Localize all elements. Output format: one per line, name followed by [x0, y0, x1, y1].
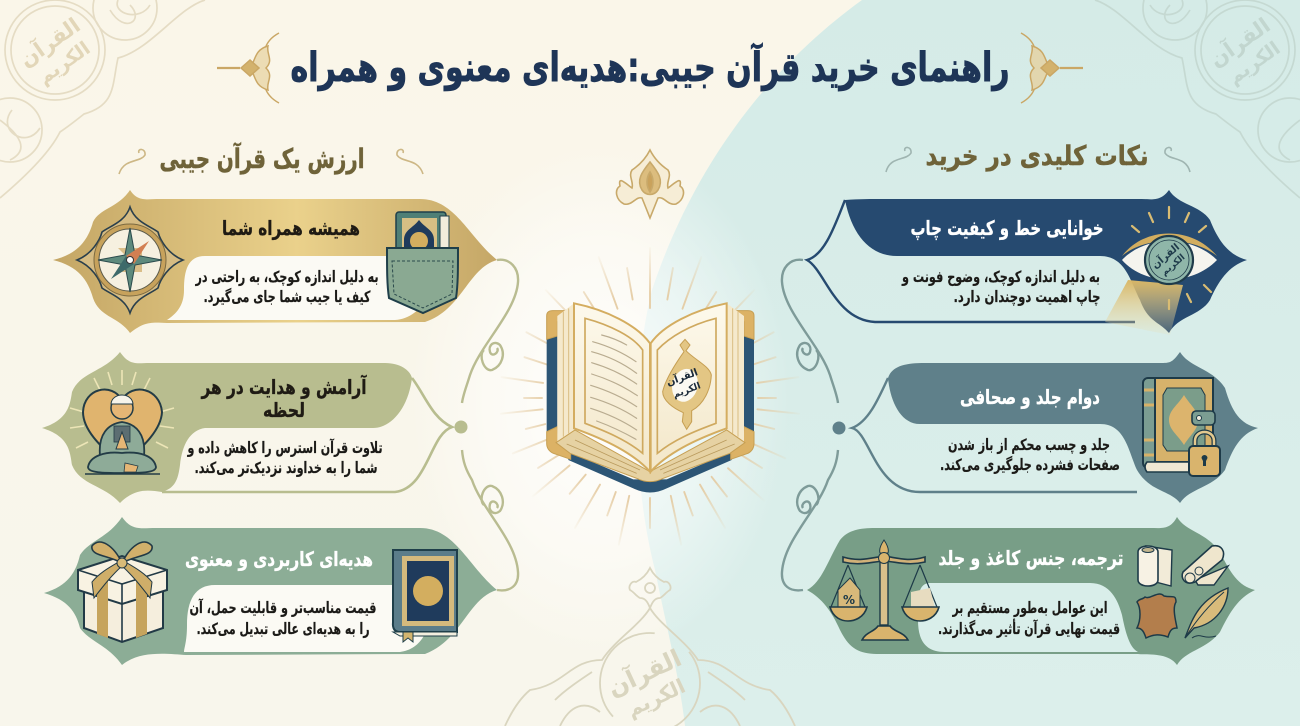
connector node [454, 420, 468, 434]
panel: peace and guidance [42, 352, 468, 503]
ornament: center flower [617, 150, 683, 218]
left page frame and lines [585, 318, 716, 453]
corner ornament: top left [0, 0, 205, 198]
panel body text: چاپ اهمیت دوچندان دارد. [954, 288, 1100, 307]
panel body text: تلاوت قرآن استرس را کاهش داده و [187, 438, 382, 457]
ornament: title right [1021, 33, 1083, 103]
icon: closed Quran [393, 550, 457, 642]
panel body text [940, 436, 1120, 474]
icon: eye with calligraphy [1105, 207, 1217, 335]
icon: pocket Quran [387, 212, 458, 313]
icon: gift box [78, 542, 167, 642]
icon: scroll [1182, 546, 1228, 585]
corner ornament: top right [1095, 0, 1300, 198]
panel body text: به دلیل اندازه کوچک، وضوح فونت و [901, 268, 1100, 287]
right page medallion [663, 339, 711, 429]
panel body text: صفحات فشرده جلوگیری می‌کند. [940, 455, 1120, 474]
icon: paper roll [1138, 546, 1172, 586]
panel body text [187, 438, 382, 477]
panel heading: لحظه [263, 398, 305, 422]
bottom center ornament: القرآن [603, 643, 686, 702]
panel heading: هدیه‌ای کاربردی و معنوی [185, 547, 373, 571]
panel body text: به دلیل اندازه کوچک، به راحتی در [195, 268, 378, 287]
panel body text [190, 598, 376, 638]
icon: meditating person [70, 370, 174, 474]
panel heading: دوام جلد و صحافی [960, 385, 1100, 409]
corner ornament: top right: الکریم [1224, 37, 1284, 89]
bottom center ornament [505, 568, 795, 726]
icon: balance scale: % [843, 593, 855, 607]
panel body text: این عوامل به‌طور مستقیم بر [952, 599, 1108, 617]
ornament: title left [217, 33, 279, 103]
central open Quran book [547, 303, 754, 492]
panel heading: آرامش و هدایت در هر [201, 374, 367, 399]
panel body text: قیمت نهایی قرآن تأثیر می‌گذارند. [938, 619, 1120, 638]
icon: leather hide [1137, 594, 1177, 638]
title: راهنمای خرید قرآن جیبی:هدیه‌ای معنوی و همراه [290, 42, 1010, 91]
panel body text [195, 268, 378, 306]
panel body text [901, 268, 1100, 307]
heading: right column: نکات کلیدی در خرید [926, 141, 1148, 172]
right page medallion: الکریم [671, 380, 702, 401]
panel: practical gift [44, 517, 497, 665]
icon: eye with calligraphy: القرآن [1149, 240, 1182, 271]
panel: translation paper binding [807, 517, 1255, 665]
corner ornament: top left: القرآن [14, 12, 85, 72]
panel body text: شما را به خداوند نزدیک‌تر می‌کند. [194, 459, 378, 477]
icon: feather quill [1185, 588, 1228, 638]
panel heading: خوانایی خط و کیفیت چاپ [910, 216, 1104, 241]
sun rays [501, 248, 799, 545]
icon: book with lock [1143, 378, 1220, 476]
right page medallion: القرآن [664, 365, 699, 389]
panel: legibility and print quality [807, 190, 1247, 335]
heading: left column: ارزش یک قرآن جیبی [160, 142, 364, 175]
panel body text: کیف یا جیب شما جای می‌گیرد. [204, 287, 371, 306]
vine connectors left [462, 260, 518, 590]
connector node [832, 422, 846, 434]
panel body text [938, 599, 1120, 638]
icon: balance scale [830, 540, 939, 640]
bottom center ornament: الکریم [623, 674, 689, 722]
corner ornament: top left: الکریم [34, 37, 94, 89]
icon: compass [77, 207, 183, 313]
panel body text: را به هدیه‌ای عالی تبدیل می‌کند. [196, 620, 370, 638]
vine connectors right [782, 260, 838, 590]
icon: eye with calligraphy: الکریم [1160, 253, 1187, 278]
panel heading [201, 374, 367, 422]
panel body text: جلد و چسب محکم از باز شدن [948, 436, 1110, 455]
panel: binding durability [832, 352, 1258, 503]
panel body text: قیمت مناسب‌تر و قابلیت حمل، آن [190, 598, 376, 617]
panel heading: همیشه همراه شما [222, 216, 360, 240]
panel heading: ترجمه، جنس کاغذ و جلد [938, 546, 1124, 570]
panel: always with you [53, 190, 497, 333]
corner ornament: top right: القرآن [1204, 12, 1275, 72]
